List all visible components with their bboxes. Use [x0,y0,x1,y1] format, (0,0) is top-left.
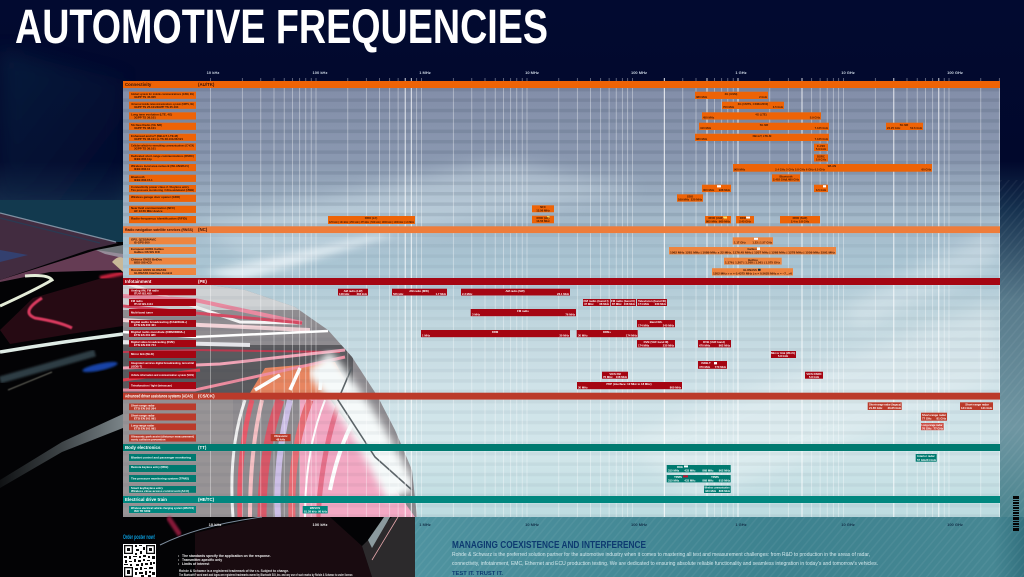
row labels: connectivity: Universal mobile telecommunications system (UMTS, 3G) [131,102,194,106]
frequency bars: connectivity: 5.9 GHz [816,158,827,162]
frequency bars: infotainment: 470 MHz [699,344,711,348]
row labels: body electronics: Tire pressure monitoring system (TPMS) [131,476,189,480]
header: infotainment [123,278,1000,285]
chart row banding [123,88,1000,517]
row labels: RNSS: IS-GPS-200 [134,240,150,244]
legal notice [179,569,353,577]
frequency bars: RNSS: BeiDou [748,258,758,262]
frequency bars: connectivity: 13.56 MHz [536,219,550,223]
frequency bars: connectivity: 960 MHz [719,219,731,223]
section: infotainment [123,278,1000,389]
bottom frequency axis labels: 10 kHz [209,522,221,527]
frequency bars: connectivity: 2.480 GHz [786,178,800,182]
frequency bars: ADAS: 21.65 GHz [869,406,883,410]
frequency bars: infotainment: FM radio (band I) [584,299,609,303]
frequency bars: infotainment: DVB (UHF band) [703,340,725,344]
bottom frequency axis labels: 10 GHz [841,522,855,527]
header: body electronics: (TT) [198,445,207,450]
header: electrical drive train [123,496,1000,503]
top frequency axis labels: 100 MHz [631,70,647,75]
header: connectivity: (AU/TK) [198,82,215,87]
header: infotainment: Infotainment [125,279,152,284]
frequency bars: connectivity: 125 kHz | 134 kHz | 250 kHz | 375 kHz | 500 kHz | 1000 kHz | 1400 kHz | 1.6 MHz [329,220,414,224]
row labels: infotainment: Analog AM, FM radio [131,289,159,293]
bottom frequency axis labels [209,522,963,527]
row labels: connectivity: Long term evolution (LTE, 4G) [131,112,172,116]
row labels: RNSS: European GNSS Galileo [131,247,164,251]
row labels: infotainment: FM radio [131,299,143,303]
frequency bars: RNSS: 1202 MHz + n × 0.4375 MHz | n × 0.5625 MHz n = −7...+6 [713,272,792,276]
bottom frequency axis labels: 1 GHz [735,522,747,527]
frequency bars: infotainment: 470 MHz [699,365,711,369]
row label: wireless charging: Wireless electrical vehicle charging system (WEVCS) [131,506,194,510]
frequency bars: infotainment: 862 MHz [719,344,731,348]
frequency bars: body electronics: 868 MHz [702,469,714,473]
frequency bars: infotainment: 174 MHz [638,302,650,306]
frequency bars: infotainment: 5.8 GHz [809,375,820,379]
row labels: ADAS: sonic collision prevention [131,438,166,442]
bottom frequency axis labels: 100 GHz [947,522,963,527]
frequency bars: connectivity: 450 MHz [703,116,715,120]
frequency bars: infotainment: DRM+ [603,330,611,334]
chart panel background [123,81,1000,517]
row labels: infotainment: Integrated services digital broadcasting, terrestrial [131,361,194,365]
frequency bars: connectivity: 380 MHz [696,137,708,141]
frequency bars: infotainment: 240 MHz [663,323,675,327]
row labels: RNSS: Russian GNSS GLONASS [131,268,166,272]
row labels: ADAS [129,404,196,442]
row labels: connectivity: HF 13.56 MHz device [134,209,163,213]
frequency bars: infotainment: 68 MHz [599,302,610,306]
row labels: ADAS: ETSI EN 302 264 [134,406,156,410]
header: ADAS: Advanced driver assistance systems (ADAS) [125,394,193,399]
frequency bars: ADAS: 76 GHz [922,426,932,430]
frequency bars: connectivity: NFC [540,205,546,209]
frequency bars: ADAS: 77 GHz [922,417,932,421]
row labels: connectivity: 3GPP TS 36.101 to TS 38.101/38.521 [134,137,184,141]
row labels: connectivity: IEEE 802.15.1 [134,178,153,182]
row labels: RNSS: Chinese GNSS BeiDou [131,258,162,262]
frequency bars: connectivity: C-V2X [817,144,825,148]
row labels: ADAS: ETSI EN 301 091 [134,416,156,420]
frequency bars: body electronics: 902 MHz [719,469,731,473]
frequency bars: infotainment: AM radio (LW) [344,289,362,293]
frequency bars: ADAS: Long-range radar [922,423,943,427]
frequency bars: connectivity: 220 MHz [691,198,703,202]
header: body electronics [123,444,1000,451]
legend bullets: Limits of interest [182,562,210,566]
row labels: connectivity: Bluetooth [131,175,145,179]
frequency bars: infotainment: 47 MHz [584,302,594,306]
row labels: infotainment: Tetrafunction / light (tetrascan) [131,384,172,388]
section: near field / wireless charging [123,496,1000,514]
row labels: body electronics: Remote keyless entry (RKE) [131,465,168,469]
frequency bars: infotainment: 26.1 MHz [557,292,570,296]
row label: wireless charging: ISO TR 6469 [134,509,151,513]
frequency bars: infotainment: DRM [492,330,499,334]
bottom frequency axis labels: 100 kHz [313,522,327,527]
row labels: connectivity: 3GPP TS 38.101 [134,126,156,130]
frequency bars: RNSS: Galileo [747,247,757,251]
frequency bars: infotainment: 5.8 GHz [778,354,789,358]
row labels: ADAS: ETSI EN 301 091 [134,426,156,430]
frequency bars: infotainment: FM radio [517,309,529,313]
frequency bars: connectivity: 2.402 GHz [773,178,787,182]
frequency bars: infotainment: Band III/L [650,320,663,324]
row labels: RNSS: GPS, QZSS/NAVIC [131,237,157,241]
frequency bars: connectivity: 2.4 GHz 5 GHz 5.8 GHz 6 GHz 6.5 GHz [775,168,825,172]
frequency bars: ADAS: 77 GHz [934,426,944,430]
frequency bars: ADAS: 134 GHz [961,406,973,410]
row labels: infotainment [129,289,196,389]
header: infotainment: (PE) [198,279,207,284]
frequency bars: RNSS: GLONASS [743,268,757,272]
frequency bars: RNSS: 1.23 | 1.57 GHz [752,240,773,244]
frequency bars: infotainment: Mirror link (Wi-Fi) [771,351,795,355]
row labels: ADAS: Long-range radar [131,424,155,428]
row labels: infotainment: Vehicle information and communication system (VICS) [131,373,194,377]
frequency bars: body electronics: 433 MHz [705,489,717,493]
row labels: connectivity: Wireless garage door opener (GDO) [131,195,180,199]
row labels: infotainment: Digital radio mondiale (DRM/DRM+) [131,330,185,334]
row labels: RNSS [129,237,196,275]
header: ADAS [123,393,1000,400]
header: electrical drive train: Electrical drive train [125,497,167,502]
top frequency axis labels: 1 GHz [735,70,747,75]
frequency bars: infotainment: 800 MHz [670,385,682,389]
row labels: infotainment: Multi-band tuner [131,310,154,314]
frequency bars: ADAS: Short-range radar [922,413,947,417]
frequency bars: infotainment: 148 kHz [339,292,350,296]
row label: wireless charging [129,506,196,513]
frequency bars: infotainment: DVB (VHF band III) [644,340,668,344]
legal notice: Rohde & Schwarz is a registered trademark of the r.s. Subject to change. [179,569,289,573]
row labels: infotainment: ETSI ES 201 980 [134,333,156,337]
frequency bars: body electronics: TPMS [674,475,682,479]
frequency bars: body electronics [667,454,937,493]
frequency bars: body electronics: TPMS [711,475,719,479]
frequency bars: connectivity: RFID (HF) [537,216,550,220]
row labels: connectivity: 3GPP TS 25.101/3GPP TS 25.104 [134,105,179,109]
frequency bars: connectivity: 4G (LTE) [755,112,767,116]
frequency bars: connectivity: 2.45 GHz [739,219,752,223]
order poster heading: Order poster now! [123,535,155,541]
frequency bars: connectivity: 5.9 GHz [810,116,821,120]
row labels: connectivity: Dedicated short-range communications (DSRC) [131,154,194,158]
frequency bars: connectivity: Bluetooth [779,174,793,178]
frequency bars: infotainment: PDP (interface: 12 MHz to 18 MHz) [606,382,652,386]
frequency bars: infotainment: 3 MHz [472,312,481,316]
frequency bars: infotainment: 30 MHz [578,333,588,337]
frequency bars: connectivity: 52.6 GHz [910,126,923,130]
bottom paragraph: connectivity, infotainment, EMC, Ethernet and ECU production testing. We are dedicated to ensuring absolute reliable functionality and seamless integration in today's and tomorrow's vehicles. [452,561,878,567]
frequency bars: infotainment: 283 kHz [357,292,368,296]
row labels: RNSS: Galileo OS SIS ICD [134,250,160,254]
frequency bars: connectivity: NB-IoT, LTE-M [753,134,772,138]
row labels: infotainment: Digital audio broadcasting (DAB/DAB+) [131,320,187,324]
frequency bars: connectivity: 3G (UMTS, CDMA2000) [738,102,768,106]
row labels: connectivity: Tire pressure monitoring / Ultra-wideband (UWB) [131,188,194,192]
row labels: connectivity: 3GPP TS 36.101 [134,115,156,119]
row labels: connectivity: Connectivity power class 2 / Keyless entry [131,185,189,189]
top frequency axis labels [207,70,963,75]
frequency bars: infotainment: 174 MHz [638,344,650,348]
frequency bars: infotainment: 770 MHz [715,365,727,369]
row labels: infotainment: ITU-R BS.1114 [134,302,153,306]
frequency bars: connectivity: 2 GHz [759,95,768,99]
frequency bars: connectivity: GDO [687,194,694,198]
frequency bars: infotainment: 76 MHz [565,312,576,316]
frequency bars: infotainment: 230 MHz [655,302,667,306]
frequency bars: connectivity: 2G (GSM) [725,92,737,96]
frequency bars: body electronics: RKE [677,465,683,469]
frequency bars: body electronics: Interior radar [917,454,936,458]
frequency bars: infotainment: FM radio (band II) [611,299,635,303]
frequency bars: ADAS: 48 kHz [276,437,286,441]
header: body electronics: Body electronics [125,445,161,450]
frequency bars: infotainment: Television (band III) [638,299,666,303]
frequency bars: infotainment: VICS FM [609,372,621,376]
row labels: connectivity [129,92,196,223]
frequency bars: body electronics: 868 MHz [702,479,714,483]
frequency bars: infotainment: 174 MHz [638,323,650,327]
row labels: ADAS: Short-range radar [131,414,156,418]
frequency bars: connectivity: 410 MHz [700,126,712,130]
frequency bars: infotainment: 30 MHz [559,333,570,337]
bottom teal area [415,517,1024,577]
bottom frequency axis labels: 1 MHz [419,522,431,527]
frequency bars: infotainment: 526 kHz [393,292,404,296]
car photo: hood seen through panel [123,280,423,520]
frequency bars: infotainment: 76 MHz [603,375,613,379]
frequency bars: body electronics: Wireless communication [704,486,730,490]
frequency bars: connectivity: 24.25 GHz [887,126,901,130]
row labels: RNSS: GLONASS Interface Control [134,271,172,275]
frequency bars: connectivity: 3.5 GHz [773,105,784,109]
frequency bars: connectivity: RFID [740,216,746,220]
frequency bars: connectivity: DSRC [817,154,825,158]
frequency bars: infotainment: AM radio (SW) [505,289,525,293]
row labels: connectivity: Enhanced and IoT (NB-IoT, LTE-M) [131,134,178,138]
row labels: connectivity: 5G New Radio (5G NR) [131,123,162,127]
frequency bars: connectivity: 60 GHz [922,168,932,172]
frequency bars: body electronics: 315 MHz [668,479,680,483]
frequency bars: infotainment: 87 MHz [612,302,622,306]
row labels: infotainment: Digital video broadcasting (DVB) [131,340,175,344]
frequency bars: connectivity: 5.9 GHz [816,147,827,151]
frequency bars: infotainment: 1 MHz [422,333,431,337]
frequency bar: WEVCS: 90 kHz [318,510,328,514]
frequency bars: infotainment: 30 MHz [578,385,588,389]
frequency bars: connectivity: 380 MHz [696,95,708,99]
frequency bars: connectivity: 865 MHz [706,219,718,223]
header: ADAS: (CS/CK) [198,394,215,399]
QR code [123,544,156,577]
frequency bars: connectivity: RFID (LF) [365,216,377,220]
row labels: ADAS: Short-range radar [131,404,156,408]
car photo: dark left side [0,200,123,577]
legend bullets: The standards specify the application on the response. [182,554,271,558]
frequency bars: connectivity: 700 MHz [723,105,735,109]
row labels: body electronics: Blanket control and passenger monitoring [131,456,191,460]
frequency bars: connectivity: WLAN [828,164,836,168]
row labels: connectivity: IEEE 802.11 [134,167,150,171]
frequency bars: ADAS: Short-range radar (legacy) [869,402,901,406]
legal notice: The Bluetooth® word mark and logos are registered trademarks owned by Bluetooth SIG, Inc. and any use of such marks by Rohde & Schwarz is under license. [179,573,353,577]
legend bullets [178,554,271,566]
section: radio navigation satellite services [123,226,1000,276]
row labels: infotainment: Mirror link (Wi-Fi) [131,352,154,356]
frequency bars: infotainment: 174 MHz [626,333,638,337]
row labels: infotainment: ETSI EN 300 744 [134,343,156,347]
frequency bars: connectivity: 300 MHz [703,188,715,192]
frequency bars: infotainment: 108 MHz [616,375,628,379]
frequency bars: ADAS: 81 GHz [937,417,947,421]
frequency bars: infotainment [338,289,823,389]
top frequency axis labels: 10 MHz [525,70,539,75]
frequency bars: RNSS: 1.176 | 1.207 | 1.268 | 1.561 | 1.575 GHz [725,261,781,265]
row labels: body electronics: Smart key/keyless entry [131,486,163,490]
frequency bars: body electronics: 57 GHz [917,458,927,462]
top frequency axis labels: 100 kHz [313,70,327,75]
frequency bars: RNSS [669,237,836,276]
row labels: connectivity: 3GPP TS 36.101 [134,146,156,150]
bottom frequency axis labels: 10 MHz [525,522,539,527]
barcode mark [1013,496,1019,531]
row labels: connectivity: 3GPP TS 45.005 [134,95,156,99]
frequency bars: body electronics: 315 MHz [668,469,680,473]
header: connectivity [123,81,1000,88]
row labels: connectivity: Wireless local area network (WLAN/Wi-Fi) [131,164,189,168]
row labels: connectivity: Near field communication (NFC) [131,206,175,210]
row labels: connectivity: Radio-frequency identification (RFID) [131,216,187,220]
legend bullets: Transmitter-specific only [182,558,222,562]
frequency bars: ADAS: 141 GHz [981,406,993,410]
bottom paragraph [452,552,878,567]
top frequency axis labels: 100 GHz [947,70,963,75]
frequency bars: connectivity: 928 MHz [719,188,731,192]
frequency bars: body electronics: 915 MHz [719,479,731,483]
legend bullets: • [178,562,180,566]
row labels: connectivity: IEEE 802.11p [134,157,152,161]
row labels: body electronics [129,454,196,493]
section: connectivity [123,81,1000,224]
header: connectivity: Connectivity [125,82,152,87]
legend bullets: • [178,558,180,562]
frequency bar: WEVCS: WEVCS [310,506,320,510]
header: RNSS: Radio navigation satellite services (RNSS) [125,227,194,232]
frequency bars: connectivity: 13.56 MHz [536,208,550,212]
row labels: body electronics: Wireless close access control unit (ACU) [131,489,189,493]
frequency bars: connectivity: 169 MHz [678,198,690,202]
section: body electronics [123,444,1000,493]
frequency grid lines [210,78,999,517]
frequency bars: connectivity: 7.125 GHz [815,126,829,130]
frequency bars: connectivity: 7.125 GHz [815,137,829,141]
bottom paragraph: Rohde & Schwarz is the preferred solution partner for the automotive industry when it comes to mastering all test and measurement challenges: from R&D to production in the areas of radar, [452,552,870,558]
frequency bars: connectivity: 2.4 to 5.8 GHz [791,219,810,223]
section: advanced driver assistance systems [123,393,1000,442]
frequency bars: ADAS: Short-range radar [965,402,990,406]
frequency bars: connectivity: 5G NR [760,123,768,127]
frequency bars: ADAS: Ultrasonic [274,434,288,438]
row labels: connectivity: Cellular vehicle-to-everything communications (C-V2X) [131,143,194,147]
frequency bars: connectivity: 3.5 GHz [816,188,827,192]
frequency bar: WEVCS: 81.38 kHz [304,510,317,514]
frequency bars: infotainment: VICS DSRC [806,372,822,376]
header: electrical drive train: (HE/TC) [198,497,215,502]
row labels: connectivity: Global system for mobile communications (GSM, 2G) [131,92,194,96]
bottom black area with car [0,517,415,577]
frequency bars: body electronics: 433 MHz [684,479,696,483]
row labels: infotainment: ITU-R BS.450 [134,292,152,296]
frequency bars: ADAS [271,402,999,441]
frequency bars: infotainment: 230 MHz [663,344,675,348]
frequency bars: infotainment: AM radio (MW) [409,289,429,293]
frequency bars: body electronics: 433 MHz [684,469,696,473]
frequency bars: infotainment: 108 MHz [624,302,636,306]
bottom heading: MANAGING COEXISTENCE AND INTERFERENCE [452,540,646,551]
frequency bars: body electronics: 64 GHz [927,458,937,462]
frequency bars: infotainment: ISDB-T [701,361,711,365]
title: AUTOMOTIVE FREQUENCIES [15,1,548,54]
row labels: infotainment: (ISDB-T) [131,364,142,368]
top frequency axis labels: 1 MHz [419,70,431,75]
frequency bars: RNSS: 1.17 GHz [734,240,746,244]
frequency bars: RNSS: 1062 MHz 1281 MHz | 1089 MHz x 22 MHz, 1176.45 MHz | 1207 MHz | 1268 MHz | 1278 MHz | 1559 MHz 1591 MHz [670,251,836,255]
row labels: infotainment: ETSI EN 300 401 [134,323,156,327]
top frequency axis labels: 10 GHz [841,70,855,75]
frequency bars: connectivity: 900 MHz [734,168,746,172]
frequency bars: connectivity: RFID (SHF) [793,216,807,220]
frequency bars: connectivity [328,92,932,224]
tagline: TEST IT. TRUST IT. [452,571,503,577]
frequency bars: infotainment: 2.3 MHz [462,292,473,296]
row labels: RNSS: BDS-SIS-ICD [134,261,152,265]
frequency bars: connectivity: 5G NR [900,123,908,127]
frequency bars: body electronics: 868 MHz [719,489,731,493]
frequency bars: infotainment: 1.7 MHz [436,292,447,296]
row labels: ADAS: Ultrasonic park assist (distance measurement) [131,434,194,438]
legend bullets: • [178,554,180,558]
header: RNSS: (NC) [198,227,208,232]
bottom frequency axis labels: 100 MHz [631,522,647,527]
frequency bars: connectivity: RFID (UHF) [709,216,724,220]
top frequency axis labels: 10 kHz [207,70,219,75]
frequency bar: WEVCS [303,506,328,514]
frequency bars: ADAS: 26.65 GHz [888,406,902,410]
header: RNSS [123,226,1000,233]
